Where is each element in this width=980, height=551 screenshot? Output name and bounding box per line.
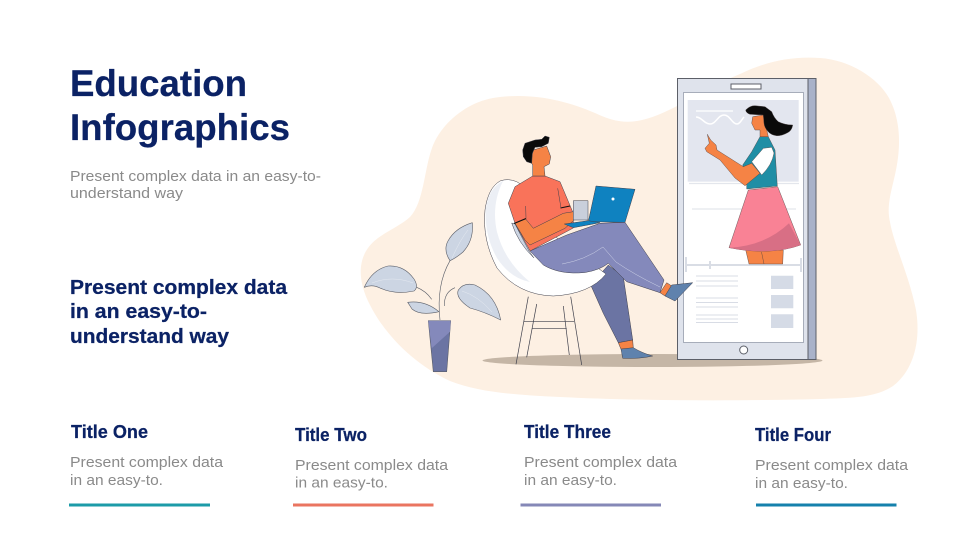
card: title one: Present complex data (70, 454, 224, 471)
title: Infographics (70, 107, 290, 148)
phone speaker (731, 84, 761, 89)
cup (573, 201, 588, 220)
card: title four (755, 425, 909, 506)
card: title two: in an easy-to. (295, 474, 388, 492)
leaf veins (372, 230, 492, 312)
sleeve (752, 147, 774, 175)
top leaf (446, 223, 473, 261)
arm (705, 134, 760, 186)
slider (686, 257, 801, 272)
content boxes (771, 276, 793, 328)
hair (523, 136, 549, 163)
card: title one (69, 422, 224, 506)
legs (746, 250, 783, 264)
card: title two: Title Two (295, 425, 367, 445)
subtitle: Present complex data in an easy-to- (70, 168, 321, 185)
background blob (361, 58, 918, 400)
pot highlight (428, 321, 451, 348)
back shoe (621, 348, 653, 358)
face and neck (752, 115, 768, 137)
front shoe (665, 283, 693, 301)
pot (428, 321, 451, 372)
face and neck (531, 146, 551, 176)
panel heading line (696, 110, 733, 112)
card: title three: in an easy-to. (524, 472, 617, 489)
back lower leg (591, 265, 633, 343)
card: title four: in an easy-to. (755, 475, 848, 492)
subtitle: understand way (70, 185, 184, 202)
skirt shade (729, 223, 801, 251)
screen lines (689, 184, 799, 209)
card: title two: Present complex data (295, 457, 449, 474)
stems (417, 261, 455, 320)
chair inner back (512, 223, 534, 258)
shirt (508, 176, 573, 251)
top (743, 137, 777, 189)
card: title two (293, 425, 449, 506)
sleeve cuff (514, 206, 570, 224)
leg highlight (562, 247, 660, 287)
title (70, 63, 290, 148)
title: Education (70, 63, 247, 104)
small leaf (408, 302, 439, 313)
laptop dot (612, 198, 614, 200)
phone screen (684, 92, 804, 342)
card: title one: in an easy-to. (70, 472, 163, 489)
front sock (660, 283, 672, 296)
hair (746, 106, 793, 136)
top leg (530, 222, 664, 293)
video panel (688, 100, 799, 182)
shirt creases (526, 188, 561, 218)
card: title three: Title Three (524, 422, 611, 442)
phone side edge (808, 78, 816, 360)
card: title one: Title One (71, 422, 148, 442)
laptop screen (588, 186, 635, 222)
card: title four: Title Four (755, 425, 831, 445)
card: title three: Present complex data (524, 454, 678, 471)
subtitle (70, 168, 321, 202)
illustration: woman (705, 106, 801, 264)
chair legs (516, 297, 582, 365)
chair shade (486, 181, 530, 282)
chair seat (484, 180, 606, 296)
back sock (618, 340, 633, 349)
illustration: man in chair (484, 136, 693, 365)
laptop base (564, 221, 600, 228)
illustration: plant (364, 223, 501, 372)
subheading: understand way (70, 326, 230, 348)
subheading (70, 277, 288, 348)
left leaf (364, 266, 416, 292)
floor shadow (482, 354, 822, 367)
phone body (678, 78, 816, 360)
illustration: phone (678, 78, 816, 360)
card: title four: Present complex data (755, 457, 909, 474)
subheading: in an easy-to- (70, 301, 207, 323)
forearm (515, 212, 576, 245)
panel wave (696, 115, 744, 124)
card: title three (520, 422, 678, 506)
skirt (729, 187, 801, 251)
right leaf (458, 284, 501, 320)
home button (740, 346, 748, 354)
text lines (696, 276, 738, 322)
subheading: Present complex data (70, 277, 288, 299)
